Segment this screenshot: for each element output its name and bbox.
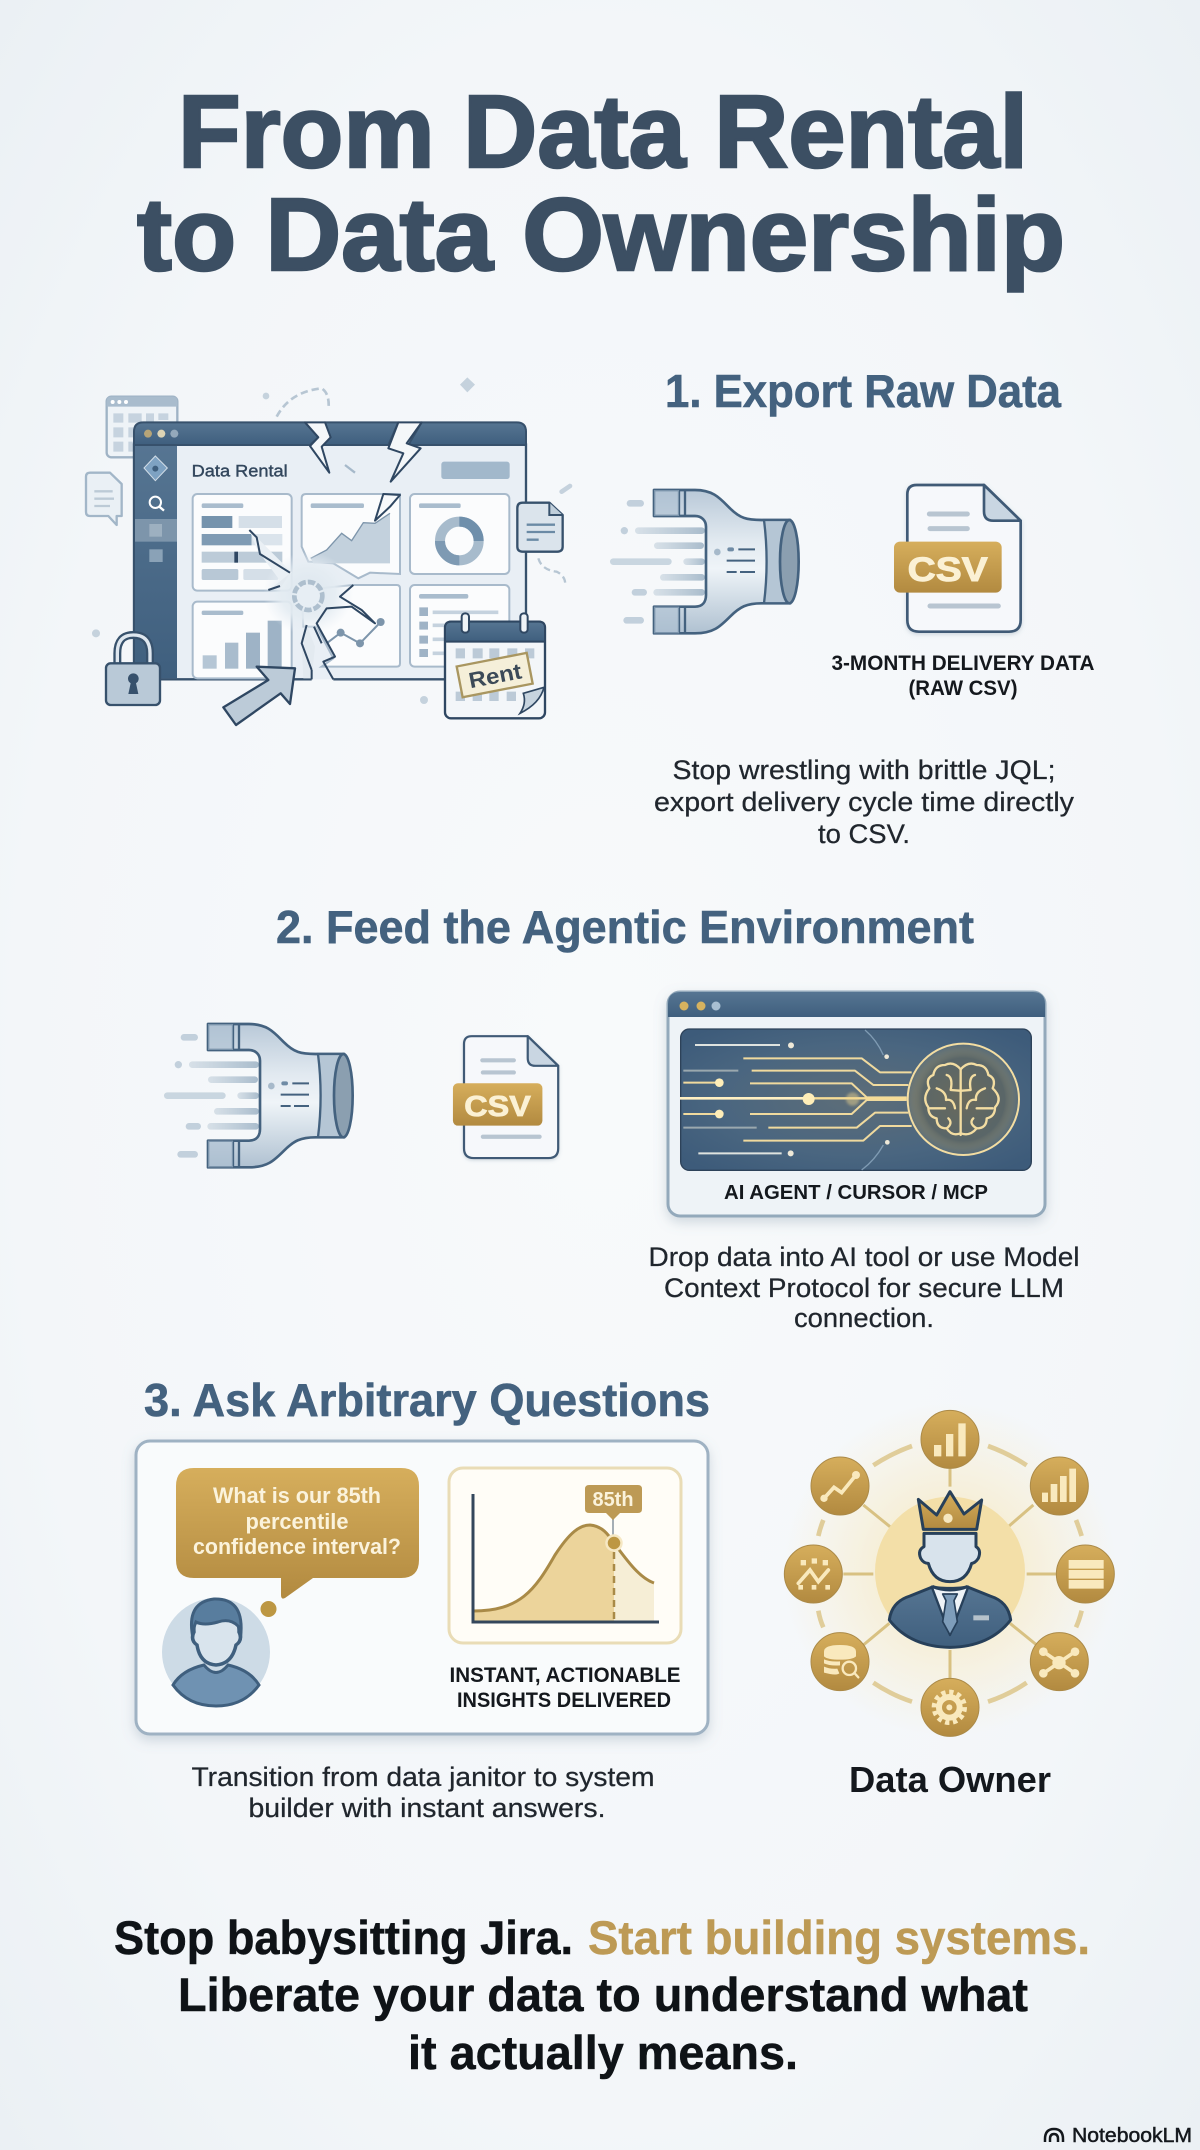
label: 3-month delivery data: 3-MONTH DELIVERY DATA (832, 652, 1094, 675)
note bubble (86, 473, 122, 525)
closing statement: Stop babysitting Jira. (114, 1911, 573, 1964)
text: step 2 description: connection. (794, 1303, 934, 1333)
text: step 2 description (648, 1242, 1080, 1333)
panel: AI agent window: AI AGENT / CURSOR / MCP (724, 1182, 988, 1204)
card: area chart (302, 494, 400, 578)
decorative sparks (92, 377, 570, 704)
shatter (249, 530, 375, 679)
closing statement: Liberate your data to understand what (178, 1968, 1028, 2021)
card: list (410, 585, 509, 667)
heading: step 3: 3. Ask Arbitrary Questions (144, 1374, 710, 1426)
title: to Data Ownership (137, 177, 1065, 292)
rent calendar (445, 613, 545, 718)
heading: step 1: 1. Export Raw Data (665, 365, 1061, 417)
closing statement: Start building systems. (588, 1911, 1090, 1964)
chart: percentile curve (449, 1468, 681, 1643)
text: step 2 description: Context Protocol for secure LLM (664, 1273, 1064, 1303)
illustration: broken data rental dashboard (86, 377, 570, 725)
dashboard window: Data Rental (192, 462, 288, 481)
panel: question and insight card (136, 1441, 708, 1734)
neural panel (680, 1029, 1031, 1170)
icon: csv file step 2 (453, 1036, 558, 1158)
icon: crowned owner figure (889, 1492, 1011, 1647)
speech bubble: percentile (246, 1509, 348, 1534)
speech bubble: confidence interval? (193, 1534, 401, 1559)
illustration: data owner hub (783, 1403, 1117, 1737)
label: 3-month delivery data (832, 652, 1094, 700)
icon: pipe step 2 (164, 1024, 353, 1167)
card: bar chart (193, 602, 292, 678)
dashboard window (134, 422, 526, 679)
icon: user avatar (162, 1598, 270, 1706)
card: line chart (302, 585, 400, 667)
text: step 3 description: builder with instant answers. (248, 1793, 606, 1823)
speech bubble (176, 1468, 419, 1617)
NotebookLM logo: NotebookLM (1072, 2125, 1192, 2147)
title bar cracks (305, 422, 422, 521)
label: instant insights (450, 1664, 680, 1712)
label: data owner: Data Owner (849, 1759, 1051, 1800)
text: step 1 description: Stop wrestling with brittle JQL; (672, 755, 1056, 785)
closing statement (114, 1911, 1090, 2079)
mini table window (107, 397, 177, 457)
text: step 3 description: Transition from data janitor to system (192, 1762, 654, 1792)
text: step 3 description (192, 1762, 654, 1823)
card: donut (410, 494, 509, 574)
icon: csv file step 1 (894, 485, 1021, 632)
padlock (106, 635, 160, 705)
label: instant insights: INSIGHTS DELIVERED (457, 1689, 671, 1712)
icon: brain (908, 1044, 1019, 1155)
text: step 1 description: export delivery cycle time directly (654, 787, 1075, 817)
floating document (517, 503, 563, 552)
closing statement: it actually means. (408, 2026, 798, 2079)
panel: AI agent window (668, 992, 1045, 1216)
chart: percentile curve: 85th (592, 1489, 634, 1511)
rent calendar: Rent (467, 658, 524, 693)
speech bubble: What is our 85th (213, 1483, 381, 1508)
heading: step 2: 2. Feed the Agentic Environment (276, 901, 974, 953)
icon: pipe step 1 (610, 490, 799, 633)
text: step 2 description: Drop data into AI tool or use Model (648, 1242, 1080, 1272)
hub icons (784, 1410, 1114, 1736)
title (137, 74, 1065, 292)
label: 3-month delivery data: (RAW CSV) (908, 677, 1018, 700)
cursor arrow (223, 667, 295, 725)
title: From Data Rental (178, 74, 1028, 189)
text: step 1 description (654, 755, 1075, 849)
text: step 1 description: to CSV. (818, 819, 910, 849)
card: table (193, 494, 292, 591)
label: instant insights: INSTANT, ACTIONABLE (450, 1664, 680, 1687)
